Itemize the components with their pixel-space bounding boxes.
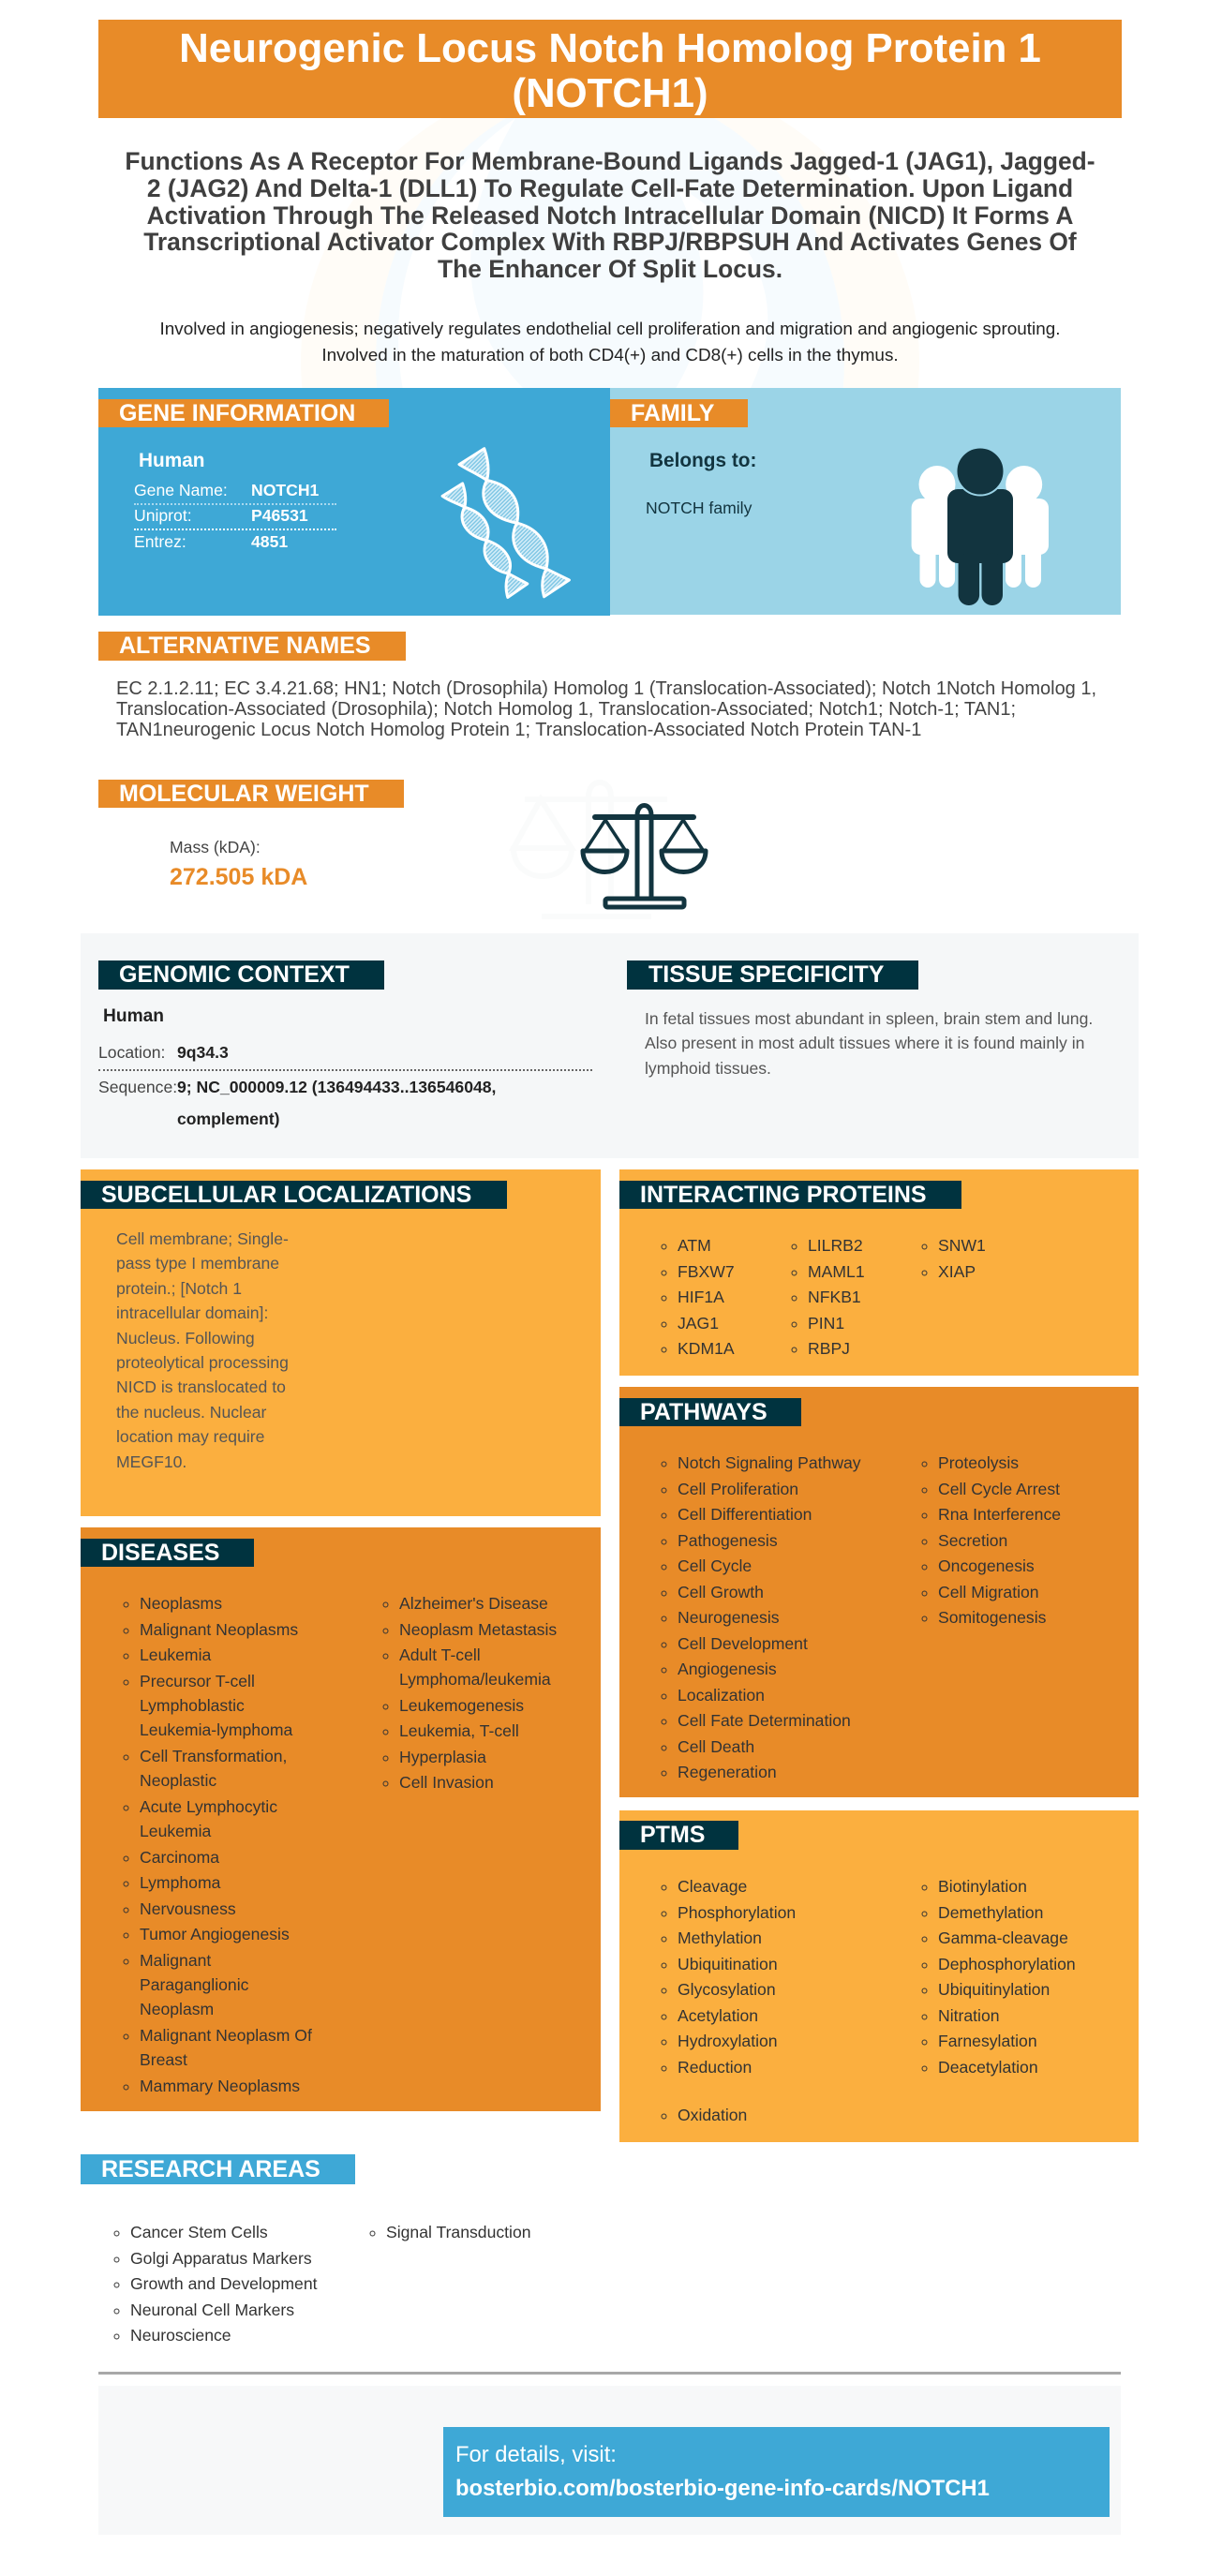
panel: gene information: 4851	[251, 532, 288, 551]
subcellular text: MEGF10.	[116, 1452, 186, 1471]
list column 2: PIN1	[808, 1314, 844, 1333]
diseases column 2: Hyperplasia	[399, 1748, 486, 1766]
subcellular text: intracellular domain]:	[116, 1303, 268, 1322]
diseases column 1: Malignant Neoplasms	[140, 1619, 298, 1638]
pathways column 1: Cell Growth	[678, 1582, 764, 1601]
title: Neurogenic Locus Notch Homolog Protein 1	[179, 25, 1041, 71]
ptms column 1: Glycosylation	[678, 1980, 776, 1999]
function summary: Functions As A Receptor For Membrane-Bound Ligands Jagged-1 (JAG1), Jagged-	[125, 147, 1095, 175]
list column 2: LILRB2	[808, 1236, 863, 1255]
ptms column 1: Hydroxylation	[678, 2032, 778, 2050]
pathways column 2: Somitogenesis	[938, 1608, 1046, 1627]
icon: balance scale	[581, 803, 708, 909]
pathways column 1: Notch Signaling Pathway	[678, 1453, 861, 1472]
description: Involved in angiogenesis; negatively regulates endothelial cell proliferation and migration and angiogenic sprouting.	[160, 320, 1060, 339]
pathways column 2: Rna Interference	[938, 1505, 1061, 1524]
list column 2	[791, 1236, 865, 1358]
heading: diseases: DISEASES	[101, 1540, 219, 1566]
list column 2: NFKB1	[808, 1288, 861, 1306]
ptms column 2: Ubiquitinylation	[938, 1980, 1050, 1999]
heading: pathways	[619, 1398, 801, 1426]
alternative names text	[116, 678, 1096, 740]
diseases column 1: Cell Transformation,	[140, 1747, 287, 1765]
heading: subcellular localizations: SUBCELLULAR LOCALIZATIONS	[101, 1182, 471, 1208]
function summary: Transcriptional Activator Complex With RBPJ/RBPSUH And Activates Genes Of	[143, 228, 1077, 256]
subcellular text: the nucleus. Nuclear	[116, 1403, 266, 1422]
title: (NOTCH1)	[512, 70, 708, 116]
icon: people	[911, 448, 1049, 605]
panel: pathways	[619, 1387, 1139, 1797]
function summary: The Enhancer Of Split Locus.	[438, 255, 782, 283]
diseases column 2: Leukemogenesis	[399, 1696, 524, 1715]
list column 1: JAG1	[678, 1314, 719, 1333]
pathways column 1: Angiogenesis	[678, 1660, 777, 1678]
ptms column 2: Nitration	[938, 2005, 1000, 2024]
species label: Human	[139, 450, 204, 471]
diseases column 1: Mammary Neoplasms	[140, 2077, 300, 2095]
diseases column 2: Leukemia, T-cell	[399, 1721, 519, 1740]
ptms column 1: Oxidation	[678, 2106, 747, 2124]
gene name row	[134, 478, 336, 505]
pathways column 2: Proteolysis	[938, 1453, 1019, 1472]
function summary	[125, 147, 1095, 283]
heading: ptms: PTMS	[640, 1822, 705, 1848]
heading: tissue specificity: TISSUE SPECIFICITY	[648, 961, 884, 988]
footer divider	[98, 2372, 1121, 2375]
research areas column 1: Growth and Development	[130, 2274, 318, 2293]
diseases column 1: Carcinoma	[140, 1848, 219, 1867]
diseases column 2: Cell Invasion	[399, 1773, 494, 1792]
diseases column 1	[124, 1594, 312, 2095]
callout: details link: For details, visit:	[455, 2442, 617, 2467]
heading: alternative names: ALTERNATIVE NAMES	[119, 633, 371, 659]
pathways column 2: Secretion	[938, 1531, 1007, 1550]
list column 1	[662, 1236, 735, 1358]
pathways column 2: Oncogenesis	[938, 1556, 1035, 1575]
pathways column 1: Regeneration	[678, 1763, 777, 1781]
belongs to label: Belongs to:	[649, 450, 756, 471]
gene name row: Gene Name:	[134, 481, 228, 499]
diseases column 2	[382, 1594, 557, 1792]
pathways column 2: Cell Cycle Arrest	[938, 1479, 1060, 1497]
diseases column 1: Malignant Neoplasm Of	[140, 2026, 312, 2045]
pathways column 1: Cell Fate Determination	[678, 1711, 851, 1730]
diseases column 1: Neoplasms	[140, 1594, 222, 1613]
ptms column 1: Cleavage	[678, 1877, 747, 1896]
research areas column 1: Golgi Apparatus Markers	[130, 2249, 312, 2268]
diseases column 1: Nervousness	[140, 1899, 236, 1918]
function summary: 2 (JAG2) And Delta-1 (DLL1) To Regulate Cell-Fate Determination. Upon Ligand	[147, 174, 1073, 202]
family value: NOTCH family	[646, 499, 752, 517]
uniprot row: P46531	[251, 506, 308, 525]
diseases column 1: Neoplastic	[140, 1771, 216, 1790]
heading: molecular weight: MOLECULAR WEIGHT	[119, 781, 369, 807]
pathways column 1: Cell Cycle	[678, 1556, 752, 1575]
subcellular text: NICD is translocated to	[116, 1377, 286, 1396]
icon: dna	[440, 447, 571, 600]
mass value: 272.505 kDA	[170, 864, 307, 890]
panel: interacting proteins	[619, 1169, 1139, 1376]
pathways column 1	[662, 1453, 861, 1781]
list column 1: KDM1A	[678, 1339, 735, 1358]
icon: balance scale ghost	[497, 778, 684, 937]
diseases column 1: Leukemia	[140, 1645, 211, 1664]
location row: 9q34.3	[177, 1043, 229, 1062]
diseases column 1: Leukemia	[140, 1822, 211, 1840]
location row	[98, 1040, 592, 1071]
subcellular text: Nucleus. Following	[116, 1329, 255, 1348]
subcellular text: location may require	[116, 1427, 264, 1446]
subcellular text: pass type I membrane	[116, 1254, 279, 1273]
diseases column 1: Acute Lymphocytic	[140, 1797, 277, 1816]
ptms column 2: Farnesylation	[938, 2032, 1037, 2050]
pathways column 1: Localization	[678, 1685, 765, 1704]
description	[160, 320, 1060, 365]
ptms column 2: Gamma-cleavage	[938, 1928, 1068, 1947]
title	[98, 20, 1122, 118]
ptms column 1: Reduction	[678, 2058, 752, 2077]
diseases column 2: Lymphoma/leukemia	[399, 1670, 551, 1689]
heading: ptms	[619, 1821, 738, 1850]
heading: genomic context: GENOMIC CONTEXT	[119, 961, 350, 988]
heading: research areas: RESEARCH AREAS	[101, 2156, 320, 2182]
list column 3: SNW1	[938, 1236, 986, 1255]
pathways column 2: Cell Migration	[938, 1582, 1039, 1601]
research areas column 1: Cancer Stem Cells	[130, 2223, 268, 2241]
heading: pathways: PATHWAYS	[640, 1399, 767, 1425]
entrez row: Entrez:	[134, 532, 186, 551]
heading: gene information: GENE INFORMATION	[119, 400, 355, 426]
description: Involved in the maturation of both CD4(+) and CD8(+) cells in the thymus.	[321, 346, 899, 365]
list column 1: ATM	[678, 1236, 711, 1255]
panel: genomic context and tissue specificity	[81, 933, 1139, 1158]
list column 1: FBXW7	[678, 1261, 735, 1280]
list column 3: XIAP	[938, 1261, 976, 1280]
diseases column 1: Malignant	[140, 1951, 211, 1970]
sequence row: Sequence:	[98, 1078, 177, 1096]
research areas column 1	[114, 2223, 318, 2345]
ptms column 1: Acetylation	[678, 2005, 758, 2024]
pathways column 2	[922, 1453, 1061, 1627]
tissue specificity text: Also present in most adult tissues where it is found mainly in	[645, 1034, 1084, 1052]
uniprot row	[134, 503, 336, 530]
callout: details link	[443, 2427, 1110, 2517]
list column 2: RBPJ	[808, 1339, 850, 1358]
panel: genomic context and tissue specificity: complement)	[177, 1109, 279, 1128]
subcellular text: protein.; [Notch 1	[116, 1279, 242, 1298]
alternative names text: Translocation-Associated (Drosophila); Notch Homolog 1, Translocation-Associated; Notch1; Notch-1; TAN1;	[116, 699, 1016, 720]
panel: genomic context and tissue specificity: 9; NC_000009.12 (136494433..136546048,	[177, 1078, 496, 1096]
ptms column 2: Dephosphorylation	[938, 1955, 1076, 1973]
pathways column 1: Cell Differentiation	[678, 1505, 812, 1524]
research areas column 2: Signal Transduction	[386, 2223, 531, 2241]
ptms column 1: Phosphorylation	[678, 1902, 796, 1921]
ptms column 1: Ubiquitination	[678, 1955, 778, 1973]
heading: diseases	[81, 1539, 254, 1567]
diseases column 1: Leukemia-lymphoma	[140, 1720, 292, 1739]
diseases column 2: Neoplasm Metastasis	[399, 1619, 557, 1638]
panel: footer	[98, 2386, 1121, 2535]
diseases column 1: Precursor T-cell	[140, 1672, 255, 1690]
heading: research areas	[81, 2154, 355, 2184]
tissue specificity text: In fetal tissues most abundant in spleen, brain stem and lung.	[645, 1009, 1093, 1028]
diseases column 2: Adult T-cell	[399, 1645, 481, 1664]
mass label: Mass (kDA):	[170, 838, 261, 856]
diseases column 1: Paraganglionic	[140, 1975, 248, 1994]
function summary: Activation Through The Released Notch Intracellular Domain (NICD) It Forms A	[147, 201, 1073, 230]
research areas column 1: Neuroscience	[130, 2326, 231, 2345]
heading: interacting proteins: INTERACTING PROTEINS	[640, 1182, 927, 1208]
heading: family	[610, 399, 748, 427]
panel: ptms	[619, 1810, 1139, 2142]
pathways column 1: Pathogenesis	[678, 1531, 778, 1550]
subcellular text	[116, 1229, 289, 1471]
research areas column 1: Neuronal Cell Markers	[130, 2300, 294, 2318]
ptms column 2	[922, 1877, 1076, 2077]
diseases column 1: Breast	[140, 2050, 187, 2069]
sequence row	[98, 1078, 496, 1128]
diseases column 1: Tumor Angiogenesis	[140, 1925, 290, 1943]
list column 3	[922, 1236, 986, 1280]
heading: family: FAMILY	[631, 400, 714, 426]
background watermark	[376, 118, 844, 388]
genomic species label: Human	[103, 1006, 164, 1026]
panel: gene information	[98, 388, 610, 616]
subcellular text: Cell membrane; Single-	[116, 1229, 289, 1248]
diseases column 2: Alzheimer's Disease	[399, 1594, 548, 1613]
pathways column 1: Neurogenesis	[678, 1608, 780, 1627]
diseases column 1: Lymphoblastic	[140, 1696, 245, 1715]
ptms column 1	[662, 1877, 796, 2124]
entrez row	[134, 532, 288, 551]
uniprot row: Uniprot:	[134, 506, 192, 525]
diseases column 1: Neoplasm	[140, 2000, 214, 2018]
pathways column 1: Cell Proliferation	[678, 1479, 798, 1497]
location row: Location:	[98, 1043, 165, 1062]
ptms column 2: Biotinylation	[938, 1877, 1027, 1896]
callout: details link: bosterbio.com/bosterbio-gene-info-cards/NOTCH1	[455, 2476, 990, 2501]
alternative names text: TAN1neurogenic Locus Notch Homolog Protein 1; Translocation-Associated Notch Protein TAN-1	[116, 720, 921, 740]
panel: family	[610, 388, 1121, 615]
pathways column 1: Cell Development	[678, 1634, 808, 1653]
list column 2: MAML1	[808, 1261, 865, 1280]
tissue specificity text: lymphoid tissues.	[645, 1059, 771, 1078]
diseases column 1: Lymphoma	[140, 1873, 220, 1892]
subcellular text: proteolytical processing	[116, 1353, 289, 1372]
list column 1: HIF1A	[678, 1288, 724, 1306]
alternative names text: EC 2.1.2.11; EC 3.4.21.68; HN1; Notch (Drosophila) Homolog 1 (Translocation-Associated); Notch 1Notch Homolog 1,	[116, 678, 1096, 699]
panel: subcellular localizations	[81, 1169, 601, 1516]
ptms column 2: Demethylation	[938, 1902, 1043, 1921]
panel: diseases	[81, 1527, 601, 2111]
pathways column 1: Cell Death	[678, 1737, 754, 1756]
tissue specificity text	[645, 1009, 1093, 1078]
ptms column 1: Methylation	[678, 1928, 762, 1947]
gene name row: NOTCH1	[251, 481, 319, 499]
ptms column 2: Deacetylation	[938, 2058, 1038, 2077]
